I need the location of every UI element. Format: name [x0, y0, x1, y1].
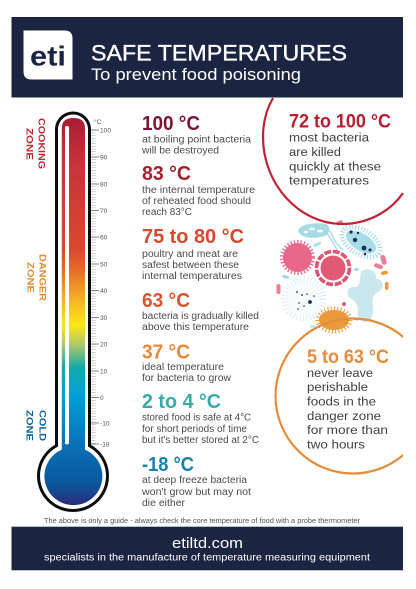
cold zone label	[24, 410, 48, 441]
scale labels: 50	[100, 262, 108, 268]
icon: eti logo	[24, 30, 72, 80]
cold zone label: ZONE	[24, 410, 34, 441]
text block: 63 °C	[142, 290, 259, 333]
text block: 37 °C: ideal temperature	[142, 362, 225, 373]
scale labels: 10	[100, 368, 108, 376]
text block: 100 °C	[141, 113, 252, 156]
text block: 63 °C: above this temperature	[142, 322, 250, 333]
text block: 83 °C	[142, 163, 256, 218]
footer banner	[12, 527, 403, 570]
scale labels: -10	[100, 420, 110, 428]
footer website: etiltd.com	[172, 536, 243, 552]
text block: 37 °C: 37 °C	[142, 342, 190, 364]
danger zone label: ZONE	[24, 262, 36, 293]
callout: 72 to 100 °C: quickly at these	[289, 160, 381, 174]
subtitle: To prevent food poisoning	[91, 66, 301, 84]
scale labels: 0	[100, 395, 104, 402]
callout: 5 to 63 °C: perishable	[307, 380, 368, 394]
cooking zone label: COOKING	[36, 118, 46, 169]
text block: 100 °C: will be destroyed	[141, 146, 219, 156]
text block: 63 °C: bacteria is gradually killed	[142, 311, 259, 322]
text block: 2 to 4 °C: for short periods of time	[142, 424, 248, 435]
callout: 5 to 63 °C: never leave	[307, 366, 373, 380]
callout: 5 to 63 °C: 5 to 63 °C	[307, 346, 389, 368]
text block: 2 to 4 °C: stored food is safe at 4°C	[142, 412, 251, 424]
text block: 75 to 80 °C: internal temperatures	[142, 271, 242, 282]
illustration: bacteria cluster	[276, 219, 388, 331]
scale labels: 60	[100, 234, 108, 242]
text block: 83 °C: of reheated food should	[142, 196, 251, 207]
danger zone label: DANGER	[36, 254, 48, 301]
callout: 72 to 100 °C: most bacteria	[289, 130, 369, 144]
scale labels: 20	[100, 342, 108, 348]
scale labels: 80	[100, 182, 108, 188]
text block: 75 to 80 °C	[142, 226, 244, 282]
scale labels	[94, 118, 111, 448]
scale labels: 40	[100, 288, 108, 295]
thermometer liquid	[44, 118, 102, 505]
text block: 75 to 80 °C: poultry and meat are	[142, 249, 239, 260]
text block: -18 °C	[141, 454, 251, 509]
scale labels: -18	[100, 442, 110, 448]
scale labels: 90	[100, 154, 108, 162]
microbe: light blue amoeba	[298, 223, 343, 254]
microbe: pale blue branching	[348, 269, 383, 322]
text block: 83 °C: reach 83°C	[142, 207, 192, 218]
orange circle arc	[276, 318, 416, 474]
cooking zone label: ZONE	[24, 128, 34, 160]
microbe: orange spiky	[318, 309, 358, 331]
title: SAFE TEMPERATURES	[91, 40, 347, 66]
footnote: The above is only a guide - always check the core temperature of food with a probe thermometer	[44, 518, 361, 525]
microbe: pink spiky	[282, 242, 313, 273]
microbe: red virus	[316, 252, 350, 284]
header banner	[12, 17, 403, 98]
callout: 5 to 63 °C: two hours	[307, 438, 365, 452]
callout: 5 to 63 °C: foods in the	[307, 394, 376, 408]
text block: 100 °C: at boiling point bacteria	[142, 134, 252, 146]
text block: 2 to 4 °C	[142, 391, 259, 446]
text block: 100 °C: 100 °C	[142, 113, 200, 135]
microbe: blue bacterium	[337, 221, 385, 263]
microbe: white spiky	[285, 280, 323, 318]
text block: 83 °C: the internal temperature	[142, 185, 256, 196]
text block: -18 °C: won't grow but may not	[141, 487, 251, 498]
scale labels: 100	[100, 128, 111, 134]
callout: 72 to 100 °C: 72 to 100 °C	[289, 110, 391, 132]
footer tagline: specialists in the manufacture of temperature measuring equipment	[44, 552, 370, 564]
text block: 37 °C: for bacteria to grow	[142, 373, 232, 384]
thermometer outline	[38, 113, 108, 510]
callout: 5 to 63 °C	[276, 318, 416, 474]
text block: 2 to 4 °C: 2 to 4 °C	[142, 391, 221, 413]
cooking zone label	[24, 118, 46, 169]
text block: 37 °C	[142, 342, 232, 384]
text block: -18 °C: -18 °C	[142, 454, 194, 476]
small pills	[276, 219, 388, 328]
text block: 83 °C: 83 °C	[142, 163, 191, 185]
text block: 63 °C: 63 °C	[142, 290, 190, 312]
callout: 5 to 63 °C: for more than	[307, 423, 388, 437]
red circle arc	[263, 98, 403, 224]
text block: -18 °C: die either	[142, 498, 186, 509]
scale labels: 70	[100, 208, 108, 215]
cold zone label: COLD	[36, 410, 48, 441]
scale ticks	[91, 130, 99, 444]
callout: 5 to 63 °C: danger zone	[307, 409, 381, 423]
text block: 75 to 80 °C: safest between these	[142, 260, 240, 271]
callout: 72 to 100 °C: temperatures	[289, 174, 369, 188]
danger zone label	[24, 254, 48, 301]
thermometer highlight	[65, 126, 69, 444]
text block: 75 to 80 °C: 75 to 80 °C	[142, 226, 244, 248]
scale labels: °C	[94, 118, 102, 126]
scale labels: 30	[100, 315, 108, 322]
text block: 2 to 4 °C: but it's better stored at 2°C	[142, 435, 259, 446]
icon: eti logo: eti	[30, 40, 66, 72]
callout: 72 to 100 °C	[263, 98, 403, 224]
thermometer	[38, 113, 111, 510]
zone labels	[24, 118, 48, 441]
text block: -18 °C: at deep freeze bacteria	[142, 475, 248, 486]
callout: 72 to 100 °C: are killed	[289, 145, 341, 159]
